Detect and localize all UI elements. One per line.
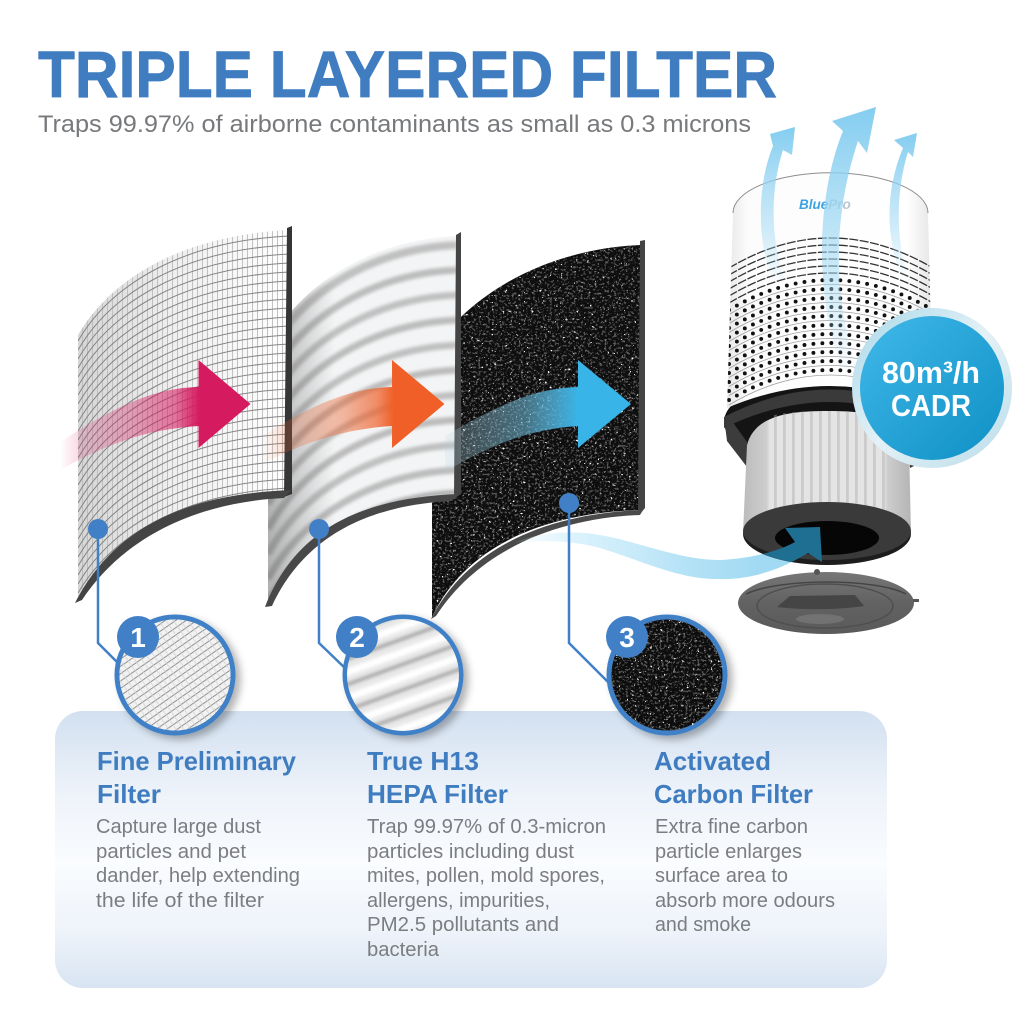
body 1: dander, help extending [96,865,300,887]
number 3: 3 [619,622,635,653]
heading 3: Carbon Filter [654,779,813,809]
panel: description background [55,711,887,988]
collar [724,377,936,468]
arrow: up left [761,127,795,285]
title: TRIPLE LAYERED FILTER [38,37,777,111]
heading 1 [97,746,297,809]
column 1 text [96,746,300,912]
heading 2: True H13 [367,746,479,776]
body 1: the life of the filter [96,890,264,912]
filter layer 2: HEPA [260,230,461,610]
filter layer 1: fine mesh [70,225,295,605]
bottom ring [743,502,911,565]
body 2: Trap 99.97% of 0.3-micron [367,816,606,838]
heading 1: Fine Preliminary [97,746,297,776]
body 2: particles including dust [367,841,574,863]
callout line 3 [559,493,610,684]
arrow: flow head over ring [763,527,822,562]
arrow: up centre [822,107,876,372]
body 3: particle enlarges [655,841,802,863]
body 3: Extra fine carbon [655,816,808,838]
body 2 [367,816,606,961]
detail circle 1 [117,616,233,733]
arrow: pink [60,360,250,470]
arrow: blue [445,360,631,472]
heading 1: Filter [97,779,161,809]
heading 3: Activated [654,746,771,776]
callout line 1 [88,519,119,664]
badge: CADR: 80m³/h [882,355,980,390]
body 1: particles and pet [96,841,246,863]
subtitle: Traps 99.97% of airborne contaminants as small as 0.3 microns [38,111,751,138]
body 1: Capture large dust [96,816,261,838]
arrow: up right [890,133,917,280]
callout line 2 [309,519,347,670]
body 3: absorb more odours [655,890,835,912]
number 1: 1 [130,622,146,653]
body 3: and smoke [655,914,751,936]
body 2: mites, pollen, mold spores, [367,865,605,887]
body 2: allergens, impurities, [367,890,550,912]
badge: CADR: CADR [891,388,971,423]
column 3 text [654,746,835,936]
lid [738,569,919,634]
arrow: orange [262,360,444,464]
detail circle 2 [336,612,466,738]
purifier [724,173,936,634]
detail circle 3 [605,615,730,740]
heading 2: HEPA Filter [367,779,508,809]
body 3: surface area to [655,865,788,887]
column 2 text [367,746,606,961]
body 2: PM2.5 pollutants and [367,914,559,936]
number 2: 2 [349,622,365,653]
brand logo: BluePro [799,197,851,212]
heading 3 [654,746,813,809]
HEPA cylinder [743,411,911,533]
body 2: bacteria [367,939,440,961]
heading 2 [367,746,508,809]
arrow: flow into purifier [513,527,822,579]
body 3 [655,816,835,936]
purifier body [727,173,933,408]
body 1 [96,816,300,912]
filter layer 3: activated carbon [425,240,650,625]
badge: CADR [852,308,1012,468]
